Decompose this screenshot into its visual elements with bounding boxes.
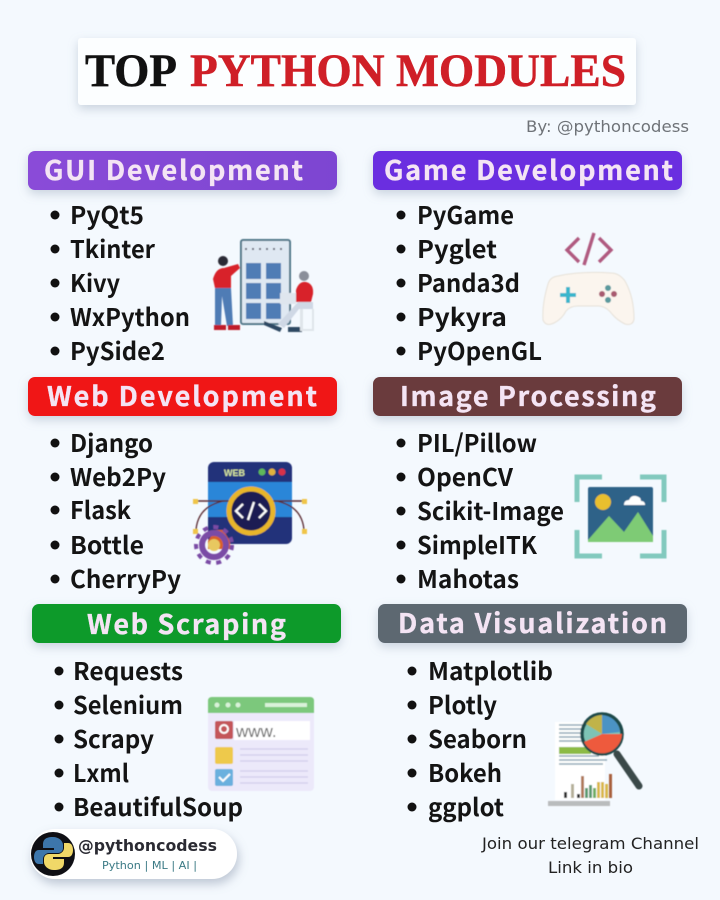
panel: GUI Development (28, 149, 337, 368)
panel: Web Development (28, 375, 337, 596)
icon: magnifier over charts (548, 714, 639, 806)
list: Web modules: Bottle (70, 527, 144, 562)
list: Web modules (50, 425, 181, 596)
list: Scraping modules: Requests (73, 653, 183, 688)
list: GUI modules: Tkinter (70, 231, 155, 266)
title card (78, 38, 636, 105)
icon: web window with code (193, 462, 307, 563)
list: Image modules: OpenCV (417, 459, 514, 494)
call to action: Join our telegram Channel (481, 834, 699, 853)
list: GUI modules: PySide2 (70, 333, 165, 368)
list: Visualization modules: Seaborn (428, 721, 527, 756)
heading: Game Development: Game Development (384, 149, 673, 188)
list: Game modules: Pyglet (417, 231, 497, 266)
icon: game controller with code tag (543, 233, 634, 324)
list: Web modules: Django (70, 425, 153, 460)
list: Visualization modules: Plotly (428, 687, 497, 722)
icon: python logo (31, 832, 75, 876)
heading: Web Development: Web Development (47, 375, 317, 414)
heading: Image Processing: Image Processing (400, 375, 656, 414)
list: Visualization modules: Matplotlib (428, 653, 553, 688)
list: GUI modules (50, 197, 190, 368)
list: Image modules: Scikit-Image (417, 493, 564, 528)
list: Image modules: Mahotas (417, 561, 519, 596)
icon: web window with code: WEB (224, 468, 245, 478)
list: Scraping modules: Scrapy (73, 721, 154, 756)
list: Game modules: Pykyra (417, 299, 507, 334)
list: GUI modules: Kivy (70, 265, 120, 300)
list: GUI modules: PyQt5 (70, 197, 144, 232)
list: Scraping modules: Selenium (73, 687, 183, 722)
heading: Web Scraping (32, 603, 341, 643)
byline: By: @pythoncodess (526, 117, 689, 136)
heading: Web Scraping: Web Scraping (87, 603, 286, 642)
list: Web modules: Web2Py (70, 459, 166, 494)
heading: Data Visualization: Data Visualization (398, 602, 667, 641)
list: Game modules: Panda3d (417, 265, 520, 300)
icon: people with app screen (213, 240, 314, 332)
call to action (481, 834, 699, 877)
badge: pythoncodess handle (30, 829, 237, 879)
call to action: Link in bio (548, 858, 633, 877)
list: Game modules (396, 197, 542, 368)
tagline: Python | ML | AI | (102, 860, 197, 872)
handle: @pythoncodess (78, 836, 217, 855)
icon: picture in focus frame (577, 477, 664, 556)
list: Scraping modules (54, 653, 243, 824)
list: Visualization modules: ggplot (428, 789, 504, 824)
panel: Game Development (373, 149, 682, 368)
panel: Data Visualization (378, 602, 687, 824)
heading: GUI Development: GUI Development (44, 149, 303, 188)
list: Visualization modules (408, 653, 553, 824)
list: Image modules: SimpleITK (417, 527, 537, 562)
icon: browser window: www. (235, 722, 277, 741)
list: Scraping modules: Lxml (73, 755, 129, 790)
list: Scraping modules: BeautifulSoup (73, 789, 243, 824)
list: Game modules: PyGame (417, 197, 514, 232)
list: GUI modules: WxPython (70, 299, 190, 334)
panel: Web Scraping (32, 603, 341, 824)
list: Web modules: CherryPy (70, 561, 181, 596)
title: TOP (85, 45, 177, 97)
list: Image modules (396, 425, 564, 596)
title: PYTHON MODULES (190, 45, 626, 97)
list: Web modules: Flask (70, 492, 131, 527)
panel: Image Processing (373, 375, 682, 596)
list: Visualization modules: Bokeh (428, 755, 502, 790)
list: Image modules: PIL/Pillow (417, 425, 537, 460)
list: Game modules: PyOpenGL (417, 333, 542, 368)
icon: browser window (208, 697, 314, 791)
